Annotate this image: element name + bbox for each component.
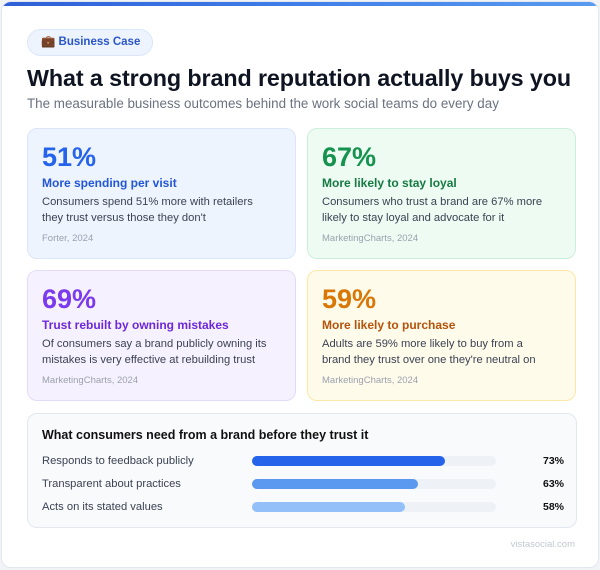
card: 67%: Consumers who trust a brand are 67% more likely to stay loyal and advocate for it xyxy=(322,196,542,224)
card: 59%: MarketingCharts, 2024 xyxy=(322,375,418,386)
bar: 63%: Transparent about practices xyxy=(42,478,181,490)
card: 59%: 59% xyxy=(322,284,376,314)
bar: 58%: Acts on its stated values xyxy=(42,501,163,513)
card: 69% xyxy=(27,270,296,401)
subtitle: The measurable business outcomes behind the work social teams do every day xyxy=(27,96,499,111)
card: 59% xyxy=(307,270,576,401)
bar: 58% xyxy=(42,501,564,513)
bar: 73%: Responds to feedback publicly xyxy=(42,455,194,467)
badge: 💼 Business Case xyxy=(41,36,140,48)
card: 67%: More likely to stay loyal xyxy=(322,176,457,190)
bar: 63% xyxy=(42,478,564,490)
card: 51%: 51% xyxy=(42,142,96,172)
card: 51%: More spending per visit xyxy=(42,176,177,190)
card: 51%: Forter, 2024 xyxy=(42,233,93,244)
card: 59%: More likely to purchase xyxy=(322,318,455,332)
footer brand: vistasocial.com xyxy=(511,539,575,550)
card: 69%: MarketingCharts, 2024 xyxy=(42,375,138,386)
bar: 63%: 63% xyxy=(543,478,564,490)
card: 51%: Consumers spend 51% more with retailers they trust versus those they don't xyxy=(42,196,253,224)
card: 67% xyxy=(307,128,576,259)
title: What a strong brand reputation actually buys you xyxy=(27,65,571,91)
card: 59%: Adults are 59% more likely to buy from a brand they trust over one they're neutral on xyxy=(322,338,536,366)
card: 67%: MarketingCharts, 2024 xyxy=(322,233,418,244)
card: 69%: Trust rebuilt by owning mistakes xyxy=(42,318,229,332)
bar: 73% xyxy=(42,455,564,467)
panel: bar chart xyxy=(27,413,577,528)
card: 51% xyxy=(27,128,296,259)
badge xyxy=(27,29,153,56)
chart heading: What consumers need from a brand before they trust it xyxy=(42,428,368,442)
card: 67%: 67% xyxy=(322,142,376,172)
bar: 58%: 58% xyxy=(543,501,564,513)
card: 69%: Of consumers say a brand publicly owning its mistakes is very effective at rebuilding trust xyxy=(42,338,266,366)
bar: 73%: 73% xyxy=(543,455,564,467)
card: 69%: 69% xyxy=(42,284,96,314)
